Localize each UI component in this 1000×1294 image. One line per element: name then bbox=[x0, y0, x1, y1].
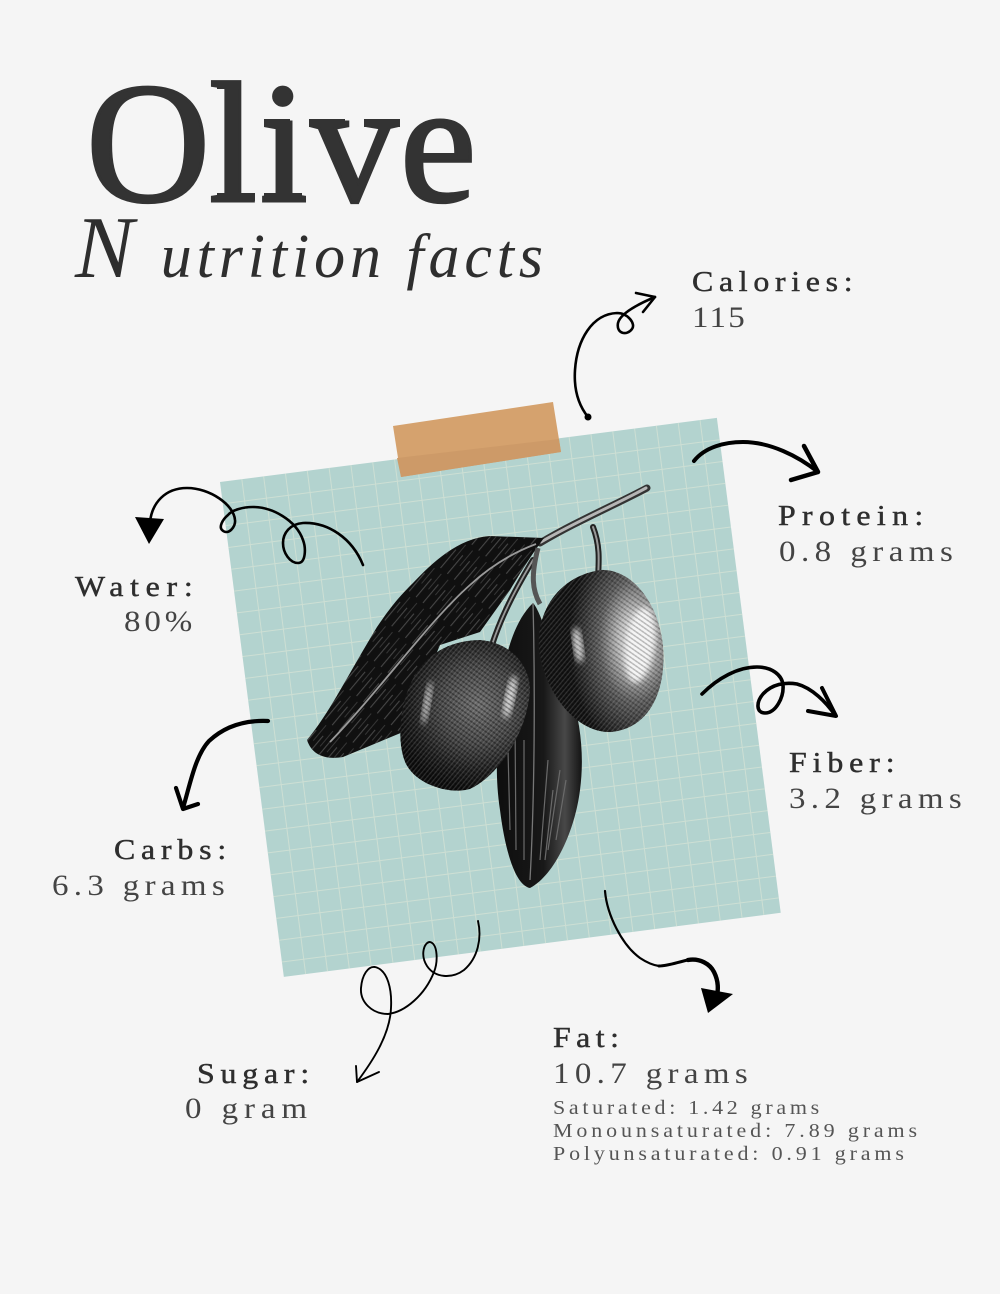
label: carbs bbox=[52, 833, 226, 902]
label: water: Water: bbox=[75, 570, 193, 603]
olive: left bbox=[400, 640, 530, 791]
olive: right bbox=[538, 570, 664, 732]
label: fat: Fat: bbox=[553, 1021, 619, 1054]
label: protein: 0.8 grams bbox=[779, 534, 953, 568]
leaf: hanging bbox=[497, 548, 582, 888]
arrow: water bbox=[135, 488, 363, 565]
fat breakdown: Polyunsaturated: 0.91 grams bbox=[553, 1142, 904, 1165]
label: water bbox=[75, 570, 193, 638]
fat breakdown: Saturated: 1.42 grams bbox=[553, 1096, 819, 1119]
label: fiber: 3.2 grams bbox=[789, 781, 962, 815]
label: sugar: 0 gram bbox=[185, 1091, 308, 1125]
subtitle: Nutrition facts: N utrition facts bbox=[74, 200, 548, 297]
infographic canvas bbox=[53, 80, 960, 1164]
arrow: calories bbox=[575, 293, 655, 420]
label: protein bbox=[778, 499, 953, 568]
arrow: protein bbox=[694, 442, 818, 480]
label: calories bbox=[692, 265, 853, 334]
illustration: olive branch bbox=[307, 488, 670, 888]
tape bbox=[393, 402, 561, 477]
arrow: carbs bbox=[176, 721, 268, 809]
leaf: left bbox=[307, 536, 544, 758]
label: fiber bbox=[789, 746, 962, 815]
label: fat bbox=[553, 1021, 917, 1165]
label: carbs: 6.3 grams bbox=[52, 868, 225, 902]
fat breakdown: Monounsaturated: 7.89 grams bbox=[553, 1119, 917, 1142]
label: fiber: Fiber: bbox=[789, 746, 895, 779]
label: sugar: Sugar: bbox=[197, 1057, 309, 1090]
label: fat: 10.7 grams bbox=[553, 1056, 748, 1090]
panel: grid paper note bbox=[220, 418, 781, 977]
label: sugar bbox=[185, 1057, 309, 1125]
fat breakdown bbox=[553, 1096, 917, 1165]
label: calories: Calories: bbox=[692, 265, 853, 298]
label: carbs: Carbs: bbox=[114, 833, 226, 866]
arrow: sugar bbox=[356, 921, 479, 1082]
label: calories: 115 bbox=[692, 300, 745, 334]
label: water: 80% bbox=[124, 604, 192, 638]
arrow: fat bbox=[605, 891, 733, 1013]
label: protein: Protein: bbox=[778, 499, 923, 532]
stems bbox=[493, 488, 647, 642]
title: Olive: Olive bbox=[86, 49, 476, 239]
arrow: fiber bbox=[702, 667, 836, 716]
